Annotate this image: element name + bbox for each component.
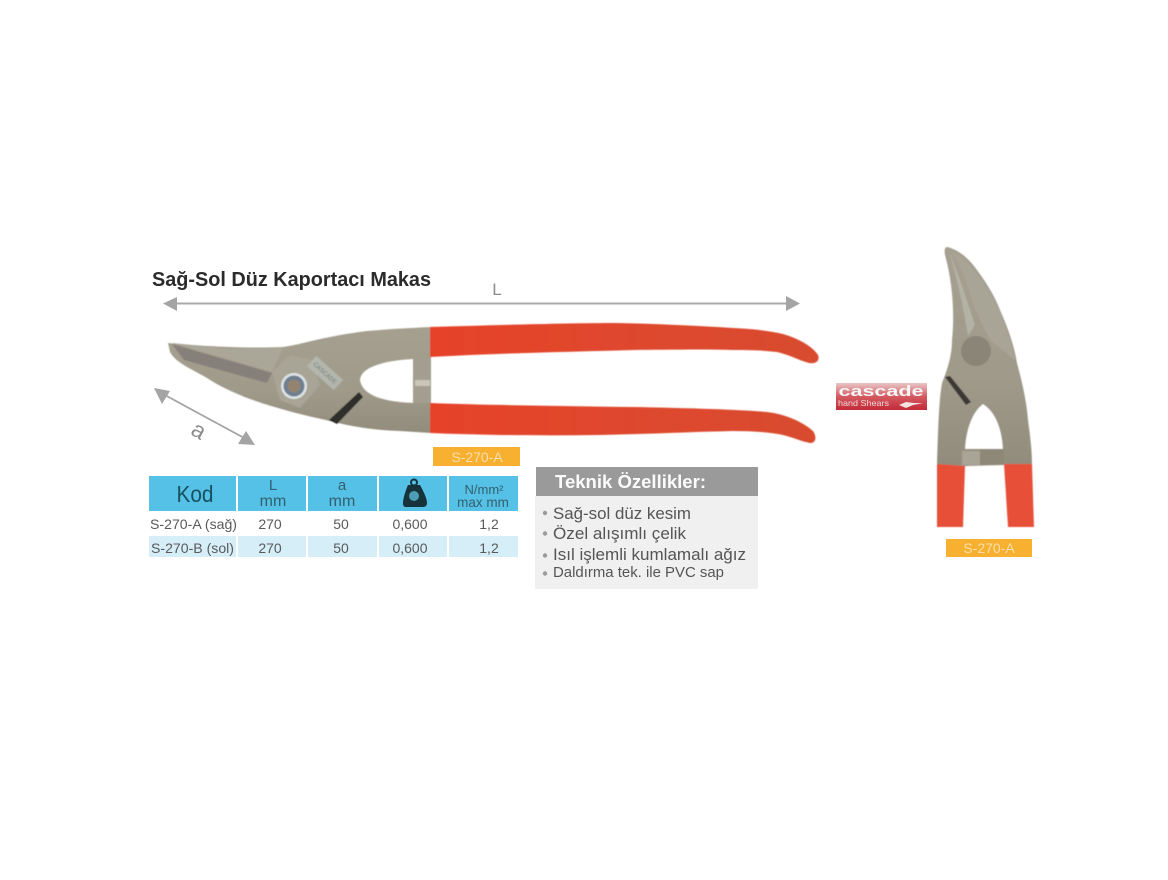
jaw gap	[329, 392, 363, 424]
table header: Kod	[176, 481, 214, 507]
icon: weight	[403, 480, 427, 507]
pivot plate	[272, 355, 320, 408]
table header: a	[338, 477, 347, 494]
left red handle	[937, 464, 965, 527]
table row: S-270-B: S-270-B (sol)	[151, 540, 234, 556]
table row: S-270-B: 0,600	[392, 540, 428, 556]
table row: S-270-A: 0,600	[392, 516, 428, 532]
table header: mm	[329, 493, 355, 510]
maker plate	[307, 356, 343, 390]
feature list	[543, 504, 746, 581]
right red handle	[1004, 464, 1034, 527]
table row: S-270-A: 1,2	[479, 516, 499, 532]
table row: S-270-A: 270	[258, 516, 282, 532]
table row: S-270-B: 1,2	[479, 540, 499, 556]
model badge: front view	[946, 539, 1032, 557]
bridge between handles	[413, 359, 431, 403]
metal body with handle opening	[168, 327, 431, 433]
product photo: shears front view	[937, 247, 1034, 527]
model badge: front view: S-270-A	[963, 540, 1015, 556]
table row: S-270-B	[149, 536, 518, 557]
model badge: side view	[433, 447, 520, 466]
title: Sağ-Sol Düz Kaportacı Makas	[152, 268, 431, 291]
blade shadow	[949, 252, 975, 336]
bridge	[962, 449, 1004, 465]
logo: cascade hand shears: hand Shears	[838, 398, 889, 408]
logo: cascade hand shears: cascade	[838, 383, 924, 400]
dimension arrow: a	[154, 388, 255, 445]
logo: cascade hand shears	[836, 383, 927, 410]
dimension arrow: L: L	[492, 280, 502, 299]
blade highlight	[949, 250, 1015, 360]
feature list: Sağ-sol düz kesim	[553, 504, 691, 523]
table header: N/mm²	[464, 482, 504, 497]
pivot bolt	[281, 373, 307, 399]
upper red handle	[430, 323, 819, 363]
feature list: Isıl işlemli kumlamalı ağız	[553, 545, 746, 564]
table row: S-270-B: 50	[333, 540, 349, 556]
table header: L	[269, 477, 277, 494]
panel heading: Teknik Özellikler:	[555, 471, 706, 492]
table header	[149, 476, 518, 511]
dimension arrow: a: a	[187, 416, 211, 445]
table header: mm	[260, 493, 286, 510]
product photo: shears side view	[168, 323, 819, 443]
table header: max mm	[457, 495, 509, 510]
specification table	[149, 476, 518, 557]
metal body with opening	[937, 247, 1032, 466]
jaw gap	[945, 376, 971, 405]
table row: S-270-B: 270	[258, 540, 282, 556]
dimension arrow: L	[163, 280, 800, 311]
table row: S-270-A: S-270-A (sağ)	[150, 516, 237, 532]
model badge: side view: S-270-A	[451, 449, 503, 465]
maker plate: CASCADE	[312, 362, 337, 386]
table row: S-270-A	[150, 516, 499, 532]
feature list: Daldırma tek. ile PVC sap	[553, 565, 724, 581]
pivot	[961, 336, 991, 366]
table row: S-270-A: 50	[333, 516, 349, 532]
lower red handle	[430, 403, 815, 443]
panel heading	[536, 467, 758, 496]
panel: technical features	[535, 467, 758, 589]
blade bevel	[172, 344, 272, 383]
feature list: Özel alışımlı çelik	[553, 524, 687, 543]
